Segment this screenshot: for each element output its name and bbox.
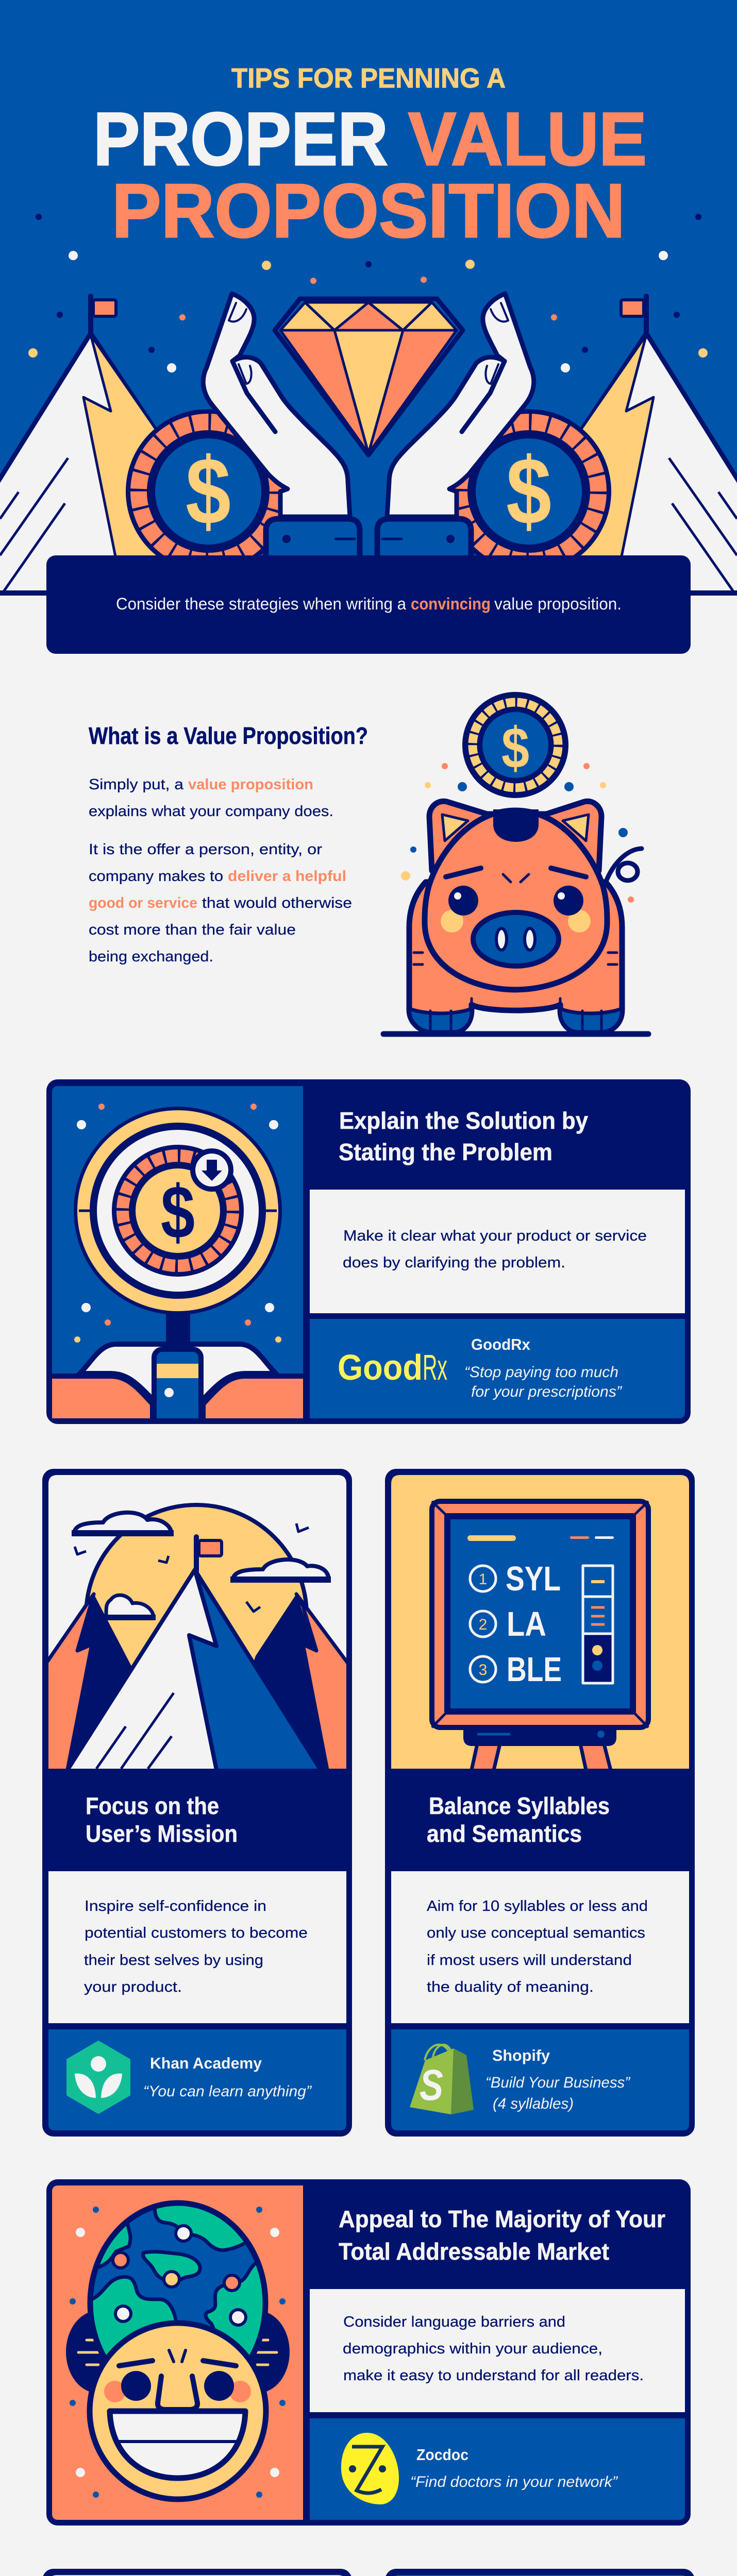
example: Shopify: “Build Your Business” (485, 2074, 631, 2091)
example: GoodRx: Good (338, 1347, 423, 1387)
coin left: $ (186, 438, 231, 545)
confetti dots (70, 2207, 286, 2498)
what is a value proposition: text: company makes to (89, 868, 223, 885)
piggy bank illustration (383, 692, 648, 1034)
hand left (203, 294, 360, 559)
headphone ears (66, 2311, 290, 2393)
intro bar: convincing (411, 595, 491, 613)
description: their best selves by using (84, 1952, 263, 1969)
description: Make it clear what your product or service (343, 1228, 647, 1244)
description: Aim for 10 syllables or less and (427, 1898, 648, 1914)
contract illustration (48, 2575, 353, 2576)
intro bar (46, 555, 691, 654)
intro bar: Consider these strategies when writing a (116, 595, 406, 613)
chalkboard illustration: SYL (506, 1560, 561, 1598)
icon: Zocdoc logo (341, 2433, 399, 2504)
description: the duality of meaning. (427, 1979, 594, 1995)
what is a value proposition: text (89, 722, 368, 965)
coin right: $ (506, 438, 551, 545)
title: Total Addressable Market (339, 2238, 609, 2265)
example: GoodRx: for your prescriptions” (471, 1383, 623, 1400)
example: Khan Academy: “You can learn anything” (143, 2083, 312, 2100)
ground line (383, 1031, 648, 1037)
title: Balance Syllables (429, 1792, 610, 1819)
title: and Semantics (427, 1820, 582, 1847)
what is a value proposition: text: that would otherwise (202, 895, 352, 911)
description: your product. (84, 1979, 182, 1995)
coin left (126, 409, 291, 574)
title: User’s Mission (86, 1820, 238, 1847)
title: Appeal to The Majority of Your (339, 2206, 665, 2232)
diamond (275, 299, 463, 455)
title (42, 1769, 352, 1871)
title: main line one: PROPER (93, 97, 388, 181)
confetti dots (28, 214, 708, 372)
description (310, 2289, 685, 2412)
card 6: contextual images (385, 2569, 695, 2576)
title: Focus on the (86, 1792, 219, 1819)
icon: Khan Academy (68, 2042, 129, 2113)
title (339, 2206, 665, 2265)
pig head (425, 810, 607, 990)
card 5: don't exaggerate (42, 2569, 353, 2576)
example: GoodRx: GoodRx (471, 1335, 531, 1353)
title: kicker: TIPS FOR PENNING A (231, 63, 506, 94)
card 4: appeal to the majority (46, 2179, 691, 2526)
description: does by clarifying the problem. (343, 1255, 565, 1271)
description: Inspire self-confidence in (85, 1898, 266, 1914)
what is a value proposition: text: It is the offer a person, entity, or (89, 841, 322, 858)
chalkboard illustration: BLE (507, 1650, 562, 1689)
magnifier illustration: $ (161, 1170, 195, 1254)
title (385, 1769, 695, 1871)
chalkboard illustration: 1 (479, 1571, 487, 1588)
what is a value proposition: text: being exchanged. (89, 948, 213, 965)
icon: Shopify bag: S (420, 2061, 443, 2109)
base line (0, 590, 737, 596)
pig face (441, 868, 591, 966)
title: Stating the Problem (339, 1139, 552, 1165)
what is a value proposition: text: good or service (89, 895, 197, 911)
description: only use conceptual semantics (427, 1925, 645, 1941)
mountain left (0, 294, 157, 590)
heading: What is a Value Proposition? (89, 722, 368, 749)
example: Khan Academy (48, 2029, 346, 2130)
what is a value proposition: text: deliver a helpful (228, 868, 346, 885)
title: Explain the Solution by (339, 1107, 588, 1134)
description (391, 1871, 689, 2023)
title: main line two: PROPOSITION (112, 168, 625, 253)
magnifier illustration (49, 1086, 306, 1427)
example: Shopify (391, 2029, 689, 2130)
face (90, 2323, 266, 2499)
globe (88, 2200, 268, 2355)
example: Zocdoc: “Find doctors in your network” (410, 2473, 618, 2490)
what is a value proposition: text: value proposition (188, 776, 313, 793)
description: make it easy to understand for all readers. (343, 2367, 644, 2384)
intro bar: value proposition. (494, 595, 622, 613)
confetti around pig (401, 763, 634, 903)
example: GoodRx: Rx (423, 1347, 447, 1387)
title: main line one: VALUE (408, 97, 647, 181)
chalkboard illustration: 2 (479, 1616, 487, 1633)
pig body (409, 882, 622, 1032)
card 3: balance syllables (385, 1469, 695, 2137)
description (310, 1190, 685, 1313)
example: Shopify: (4 syllables) (493, 2095, 574, 2112)
coin above pig (462, 692, 568, 798)
what is a value proposition: text: explains what your company does. (89, 803, 333, 820)
example: GoodRx (310, 1319, 685, 1418)
pig tail (604, 849, 642, 887)
chalkboard illustration (391, 1475, 689, 1772)
example: Shopify: Shopify (492, 2046, 550, 2064)
example: Khan Academy: Khan Academy (150, 2054, 262, 2072)
card 1: explain the solution (46, 1079, 691, 1427)
mountain illustration (44, 1475, 350, 1772)
description: demographics within your audience, (343, 2341, 602, 2357)
title (339, 1107, 588, 1165)
pig slot (493, 809, 539, 842)
hand right (377, 294, 534, 559)
description (48, 1871, 346, 2023)
polaroid illustration (391, 2575, 689, 2576)
globe face illustration (52, 2185, 303, 2520)
pig ears (429, 801, 601, 871)
mountain right (580, 294, 737, 590)
chalkboard illustration: 3 (479, 1662, 487, 1679)
title: main line one (93, 97, 647, 181)
example: GoodRx: “Stop paying too much (464, 1364, 618, 1381)
icon: Shopify bag (410, 2045, 474, 2114)
example: Zocdoc: Zocdoc (416, 2446, 468, 2464)
coin right (446, 409, 611, 574)
card 2: focus on the user's mission (42, 1469, 352, 2137)
what is a value proposition: text: cost more than the fair value (89, 922, 296, 938)
hero panel (0, 0, 737, 605)
what is a value proposition: text: Simply put, a (89, 776, 184, 793)
description: potential customers to become (85, 1925, 308, 1941)
chalkboard illustration: LA (507, 1605, 546, 1643)
coin above pig: $ (501, 716, 529, 780)
description: if most users will understand (427, 1952, 632, 1969)
example: Zocdoc (310, 2418, 685, 2520)
description: Consider language barriers and (343, 2314, 565, 2330)
